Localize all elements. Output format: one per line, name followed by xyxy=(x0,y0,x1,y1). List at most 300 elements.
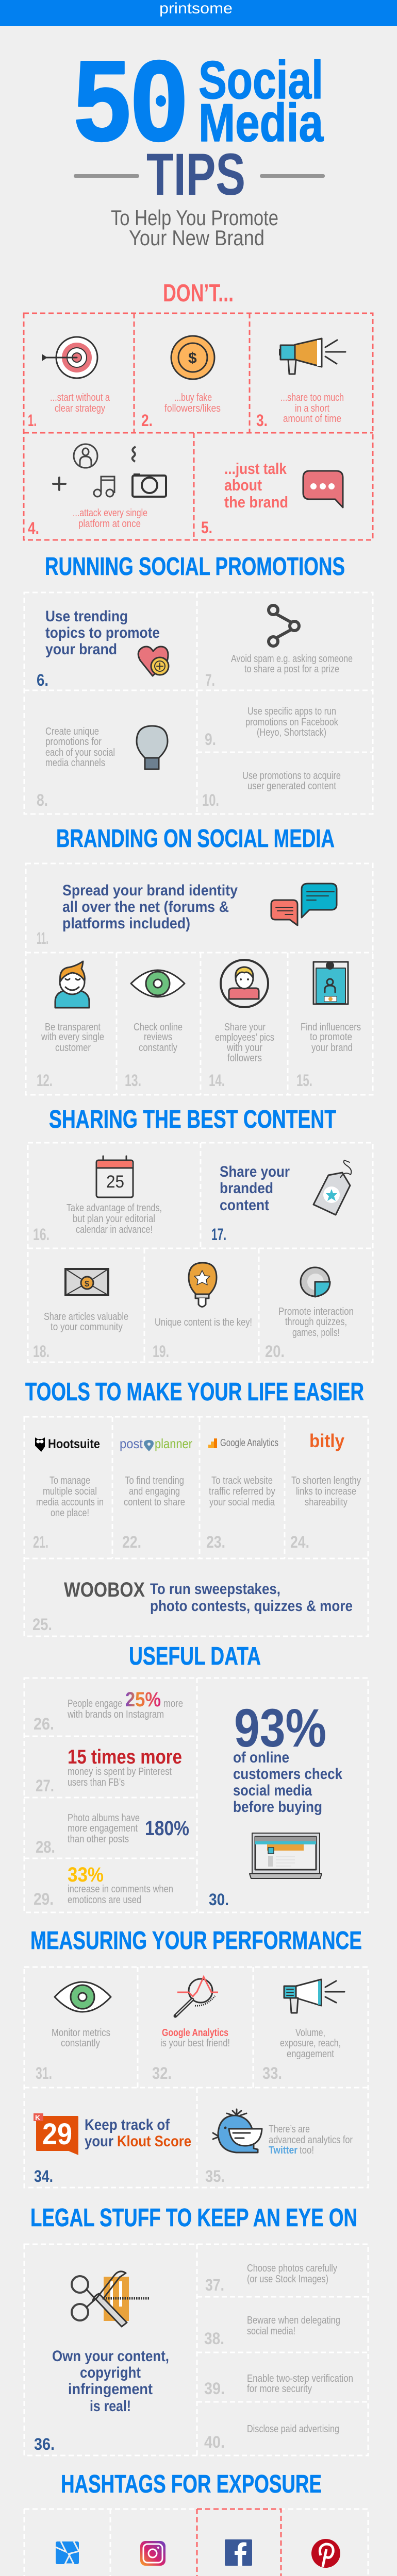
subtitle: Your New Brand xyxy=(129,226,264,250)
panel: hashtags for exposure xyxy=(24,2470,368,2576)
text: Use trending xyxy=(45,608,128,625)
text: is real! xyxy=(90,2398,131,2415)
text: in a short xyxy=(295,403,329,414)
text: Beware when delegating xyxy=(247,2315,340,2326)
text: 15 times more xyxy=(68,1746,182,1768)
icon: scissors cutting xyxy=(72,2272,150,2327)
subtitle xyxy=(111,206,278,250)
tip 37 xyxy=(205,2263,337,2294)
text: with your xyxy=(226,1042,262,1054)
text: Check online xyxy=(134,1022,183,1033)
text: social media xyxy=(233,1782,312,1799)
text: customer xyxy=(55,1042,91,1054)
logo: instagram xyxy=(140,2541,166,2566)
text: Disclose paid advertising xyxy=(247,2424,339,2435)
text: all over the net (forums & xyxy=(62,899,229,916)
text xyxy=(269,2124,353,2156)
logo: iconosquare xyxy=(56,2541,79,2564)
text xyxy=(44,1311,128,1333)
subtitle: To Help You Promote xyxy=(111,206,278,230)
text: constantly xyxy=(61,2038,100,2049)
icon: klout score: K xyxy=(35,2113,40,2122)
icon: coin xyxy=(171,336,214,379)
text: Volume, xyxy=(295,2027,325,2039)
text: copyright xyxy=(80,2364,141,2381)
tip 4 xyxy=(28,444,166,537)
text xyxy=(215,1022,274,1064)
text xyxy=(41,1022,104,1054)
text: To track website xyxy=(211,1475,273,1486)
text xyxy=(68,1863,173,1906)
number: 37. xyxy=(205,2276,224,2294)
text xyxy=(67,1202,162,1235)
text: Choose photos carefully xyxy=(247,2263,337,2274)
text: one place! xyxy=(51,1507,89,1519)
text: To shorten lengthy xyxy=(291,1475,361,1486)
text: platforms included) xyxy=(62,915,190,932)
icon: magnifier with pulse xyxy=(175,1977,218,2016)
text: too! xyxy=(300,2145,314,2156)
text: platform at once xyxy=(78,518,141,530)
tip 3 xyxy=(256,338,345,430)
panel: legal stuff xyxy=(24,2204,368,2455)
text: media channels xyxy=(45,757,105,769)
icon: influencer card xyxy=(313,961,348,1004)
tip 15 xyxy=(296,961,361,1090)
text: infringement xyxy=(68,2381,153,2398)
tip 6 xyxy=(37,608,169,689)
logo: hootsuite xyxy=(35,1437,100,1452)
tip 16 xyxy=(33,1156,162,1244)
number: 39. xyxy=(204,2379,225,2398)
text: money is spent by Pinterest xyxy=(68,1766,172,1777)
panel: sharing the best content xyxy=(28,1106,373,1362)
text xyxy=(160,2027,230,2049)
text xyxy=(124,1475,185,1508)
logo: post planner: planner xyxy=(155,1436,192,1451)
text xyxy=(45,726,115,769)
icon: star bulb xyxy=(189,1263,217,1307)
text: To manage xyxy=(49,1475,90,1486)
panel: running social promotions xyxy=(24,553,373,814)
text: Share your xyxy=(224,1022,266,1033)
number: 7. xyxy=(205,671,215,689)
icon: tag xyxy=(313,1160,351,1215)
text: about xyxy=(224,476,262,494)
panel: measuring your performance xyxy=(24,1927,368,2188)
tip 23 xyxy=(206,1437,278,1551)
icon: megaphone xyxy=(279,338,345,374)
icon: chat bubbles xyxy=(271,884,337,925)
text: with every single xyxy=(41,1031,104,1043)
text: 33% xyxy=(68,1863,104,1886)
text: before buying xyxy=(233,1799,322,1816)
number: 15. xyxy=(296,1071,312,1090)
text xyxy=(245,706,339,738)
text: Be transparent xyxy=(45,1022,101,1033)
text: Use promotions to acquire xyxy=(242,770,341,782)
tip 12 xyxy=(37,961,104,1090)
text: more engagement xyxy=(68,1823,138,1834)
tips with rules: TIPS xyxy=(146,142,245,208)
tip 1 xyxy=(28,337,110,430)
icon: klout score: 29 xyxy=(42,2117,72,2151)
number: 14. xyxy=(209,1071,225,1090)
text xyxy=(233,1749,342,1816)
icon: target xyxy=(42,337,97,378)
tip 35 xyxy=(205,2109,353,2185)
number: 6. xyxy=(37,671,48,689)
number: 2. xyxy=(141,411,153,430)
text: advanced analytics for xyxy=(269,2134,353,2146)
stat 28 xyxy=(36,1812,189,1856)
tips with rules xyxy=(74,142,325,208)
number: 18. xyxy=(33,1342,49,1361)
tip 32 xyxy=(152,1977,230,2082)
tip 39 xyxy=(204,2373,353,2398)
text: To find trending xyxy=(125,1475,184,1486)
logo: post planner: post xyxy=(120,1436,143,1451)
number: 17. xyxy=(211,1225,226,1244)
text: more xyxy=(163,1698,183,1709)
number: 24. xyxy=(290,1533,309,1551)
text: photo contests, quizzes & more xyxy=(150,1598,353,1615)
text xyxy=(52,2027,110,2049)
text xyxy=(224,460,288,511)
text: social media! xyxy=(247,2326,295,2337)
text: with brands on Instagram xyxy=(67,1709,164,1720)
tip 36 xyxy=(34,2272,169,2453)
text: Klout Score xyxy=(117,2133,191,2150)
text: ...buy fake xyxy=(174,392,212,403)
tip 34 xyxy=(34,2113,191,2185)
text: exposure, reach, xyxy=(280,2038,341,2049)
logo: google analytics xyxy=(208,1437,278,1449)
number: 40. xyxy=(204,2433,225,2451)
number: 13. xyxy=(125,1071,141,1090)
icon: bird xyxy=(213,2109,262,2153)
text: Promote interaction xyxy=(278,1306,354,1317)
text: topics to promote xyxy=(45,624,160,641)
number: 20. xyxy=(265,1342,285,1361)
text: and engaging xyxy=(129,1486,180,1497)
text: your brand xyxy=(45,641,117,658)
icon: eye xyxy=(55,1982,111,2012)
tip 8 xyxy=(37,726,168,809)
icon: speech bubble xyxy=(303,471,343,507)
text: branded xyxy=(220,1180,273,1197)
logo: bitly: bitly xyxy=(309,1430,344,1451)
icon: klout score xyxy=(34,2113,78,2155)
tip 42 xyxy=(117,2541,182,2576)
title words: Media xyxy=(198,93,324,153)
text: Own your content, xyxy=(52,2348,169,2365)
icon: envelope: $ xyxy=(85,1280,89,1289)
text xyxy=(242,770,341,792)
text: increase in comments when xyxy=(68,1884,173,1895)
text xyxy=(45,608,160,658)
text: ...attack every single xyxy=(73,507,147,519)
text: Unique content is the key! xyxy=(155,1317,252,1328)
text xyxy=(280,2027,341,2060)
logo: woobox: WOOBOX xyxy=(64,1579,145,1601)
text: multiple social xyxy=(43,1486,97,1497)
text: amount of time xyxy=(283,413,341,425)
tip 2 xyxy=(141,336,221,430)
number: 12. xyxy=(37,1071,53,1090)
text xyxy=(280,392,344,425)
text xyxy=(164,392,221,414)
text: To run sweepstakes, xyxy=(150,1581,280,1598)
text: through quizzes, xyxy=(285,1316,347,1328)
icon: megaphone xyxy=(284,1979,344,2013)
number: 36. xyxy=(34,2435,55,2453)
logo: google analytics: Google Analytics xyxy=(220,1437,278,1449)
number: 34. xyxy=(34,2167,53,2185)
text xyxy=(73,507,147,530)
text: than other posts xyxy=(68,1834,129,1845)
text: media accounts in xyxy=(36,1497,104,1508)
title words xyxy=(198,50,324,153)
text xyxy=(50,392,110,414)
stat 26 xyxy=(34,1688,183,1733)
tip 25 xyxy=(32,1579,353,1634)
icon: calendar: 25 xyxy=(106,1172,124,1192)
panel: don't xyxy=(24,280,373,540)
number: 21. xyxy=(33,1533,48,1551)
text xyxy=(231,653,353,675)
text: followers xyxy=(227,1053,262,1064)
text: traffic referred by xyxy=(209,1486,275,1497)
panel: branding on social media xyxy=(26,825,373,1095)
text: (Heyo, Shortstack) xyxy=(257,727,326,738)
text xyxy=(36,1475,104,1519)
title xyxy=(74,37,325,250)
number: 26. xyxy=(34,1715,54,1733)
icon: envelope xyxy=(65,1269,108,1295)
logo: post planner xyxy=(120,1436,192,1451)
text xyxy=(62,882,238,932)
text: ...share too much xyxy=(280,392,344,403)
icon: smiling man xyxy=(55,961,89,1008)
text: Photo albums have xyxy=(68,1812,140,1824)
panel: tools xyxy=(24,1378,368,1636)
title words: Social xyxy=(198,50,323,110)
tip 20 xyxy=(265,1267,354,1361)
text: each of your social xyxy=(45,747,115,758)
number: 19. xyxy=(153,1342,169,1361)
text: Twitter xyxy=(269,2145,297,2156)
text: games, polls! xyxy=(292,1327,340,1338)
number: 5. xyxy=(201,518,212,537)
text: emoticons are used xyxy=(68,1894,141,1906)
tip 21 xyxy=(33,1437,104,1551)
text: to your community xyxy=(51,1321,123,1333)
number: 8. xyxy=(37,791,48,809)
icon: calendar xyxy=(96,1156,133,1197)
text: but plan your editorial xyxy=(73,1213,155,1225)
icon: platform glyphs xyxy=(53,444,166,497)
text: your xyxy=(85,2133,113,2150)
tip 31 xyxy=(36,1982,111,2082)
text xyxy=(220,1163,290,1214)
text: promotions on Facebook xyxy=(245,717,339,728)
text: followers/likes xyxy=(164,403,221,414)
text: Create unique xyxy=(45,726,99,737)
number: 16. xyxy=(33,1225,49,1244)
text xyxy=(85,2116,191,2150)
heading: USEFUL DATA xyxy=(129,1642,261,1670)
tip 33 xyxy=(262,1979,344,2082)
number: 23. xyxy=(206,1533,225,1551)
text: ...just talk xyxy=(224,460,287,478)
icon: share xyxy=(269,605,299,646)
text: links to increase xyxy=(296,1486,356,1497)
number: 10. xyxy=(202,791,219,809)
text: shareability xyxy=(305,1497,348,1508)
text: Monitor metrics xyxy=(52,2027,110,2039)
tip 9 xyxy=(205,706,339,749)
tip 7 xyxy=(205,605,353,689)
text xyxy=(247,2263,337,2285)
tip 43 xyxy=(204,2539,269,2576)
number: 32. xyxy=(152,2064,172,2082)
number: 9. xyxy=(205,730,216,749)
text: your social media xyxy=(209,1497,275,1508)
text: 25% xyxy=(125,1688,161,1711)
stat 27 xyxy=(36,1746,182,1795)
text xyxy=(209,1475,275,1508)
text: Share articles valuable xyxy=(44,1311,128,1323)
icon: heart with coin xyxy=(138,647,169,676)
number: 33. xyxy=(262,2064,282,2082)
icon: eye xyxy=(131,970,185,997)
text: Use specific apps to run xyxy=(247,706,336,717)
icon: grey bulb xyxy=(137,726,168,769)
tip 14 xyxy=(209,960,274,1090)
text xyxy=(68,1812,189,1845)
text: your brand xyxy=(311,1042,353,1054)
text: customers check xyxy=(233,1766,342,1783)
tip 24 xyxy=(290,1430,361,1551)
text xyxy=(247,2315,340,2337)
tip 13 xyxy=(125,970,185,1090)
text xyxy=(68,1746,182,1788)
text: ...start without a xyxy=(50,392,110,403)
text: Avoid spam e.g. asking someone xyxy=(231,653,353,665)
text xyxy=(247,2373,353,2395)
stat 29 xyxy=(34,1863,173,1908)
logo: pinterest xyxy=(311,2539,340,2568)
header band xyxy=(0,0,397,26)
number: 1. xyxy=(28,411,37,430)
icon: employee portrait xyxy=(221,960,268,1007)
text: the brand xyxy=(224,493,288,511)
tip 18 xyxy=(33,1269,128,1361)
icon: pie chart xyxy=(301,1267,330,1297)
text: content to share xyxy=(124,1497,185,1508)
text: reviews xyxy=(144,1031,172,1043)
number: 22. xyxy=(122,1533,141,1551)
tip 22 xyxy=(120,1436,192,1551)
text: Take advantage of trends, xyxy=(67,1202,162,1214)
number: 30. xyxy=(209,1890,229,1909)
tip 41 xyxy=(33,2541,101,2576)
number: 4. xyxy=(28,519,39,537)
number: 28. xyxy=(36,1838,55,1856)
text: users than FB’s xyxy=(68,1777,125,1788)
text: calendar in advance! xyxy=(76,1224,153,1235)
text: 180% xyxy=(145,1817,189,1840)
text: Keep track of xyxy=(85,2116,170,2133)
text: promotions for xyxy=(45,736,102,748)
text xyxy=(278,1306,354,1338)
tip 40 xyxy=(204,2424,339,2451)
tip 11 xyxy=(37,882,337,947)
text xyxy=(291,1475,361,1508)
text xyxy=(301,1022,361,1054)
text: of online xyxy=(233,1749,289,1766)
text: Google Analytics xyxy=(162,2027,228,2039)
text: (or use Stock Images) xyxy=(247,2274,328,2285)
tip 17 xyxy=(211,1160,351,1244)
text: Find influencers xyxy=(301,1022,361,1033)
text: is your best friend! xyxy=(160,2038,230,2049)
logo: printsome: printsome xyxy=(159,0,233,17)
text: Enable two-step verification xyxy=(247,2373,353,2384)
number: 35. xyxy=(205,2167,225,2185)
text: Share your xyxy=(220,1163,290,1180)
text: to promote xyxy=(310,1031,352,1043)
icon: coin: $ xyxy=(188,350,197,367)
number: 11. xyxy=(37,929,48,947)
text: user generated content xyxy=(247,781,336,792)
title number 50: 50 xyxy=(74,37,188,164)
number: 31. xyxy=(36,2064,52,2082)
tip 19 xyxy=(153,1263,252,1361)
text: clear strategy xyxy=(55,403,105,414)
panel: useful data xyxy=(24,1642,368,1912)
tip 44 xyxy=(289,2539,353,2576)
number: 38. xyxy=(204,2329,224,2348)
text xyxy=(52,2348,169,2415)
stat 30 xyxy=(209,1698,342,1909)
icon: laptop xyxy=(250,1833,322,1878)
text xyxy=(150,1581,353,1615)
tip 38 xyxy=(204,2315,340,2348)
logo: hootsuite: Hootsuite xyxy=(48,1437,100,1451)
number: 27. xyxy=(36,1776,54,1795)
text: content xyxy=(220,1197,269,1214)
text: employees’ pics xyxy=(215,1032,274,1043)
tip 5 xyxy=(201,460,343,537)
text: People engage xyxy=(68,1698,122,1709)
text: engagement xyxy=(287,2048,334,2060)
text: to share a post for a prize xyxy=(244,664,339,675)
text: for more security xyxy=(247,2383,312,2395)
text: There’s are xyxy=(269,2124,310,2135)
number: 3. xyxy=(256,411,268,430)
text xyxy=(134,1022,183,1054)
text: constantly xyxy=(139,1042,177,1054)
number: 25. xyxy=(32,1615,52,1634)
text: Spread your brand identity xyxy=(62,882,238,899)
logo: facebook xyxy=(225,2539,252,2566)
heading: DON’T... xyxy=(163,280,234,307)
number: 29. xyxy=(34,1890,54,1908)
tip 10 xyxy=(202,770,341,809)
big stat: 93% xyxy=(234,1698,326,1758)
